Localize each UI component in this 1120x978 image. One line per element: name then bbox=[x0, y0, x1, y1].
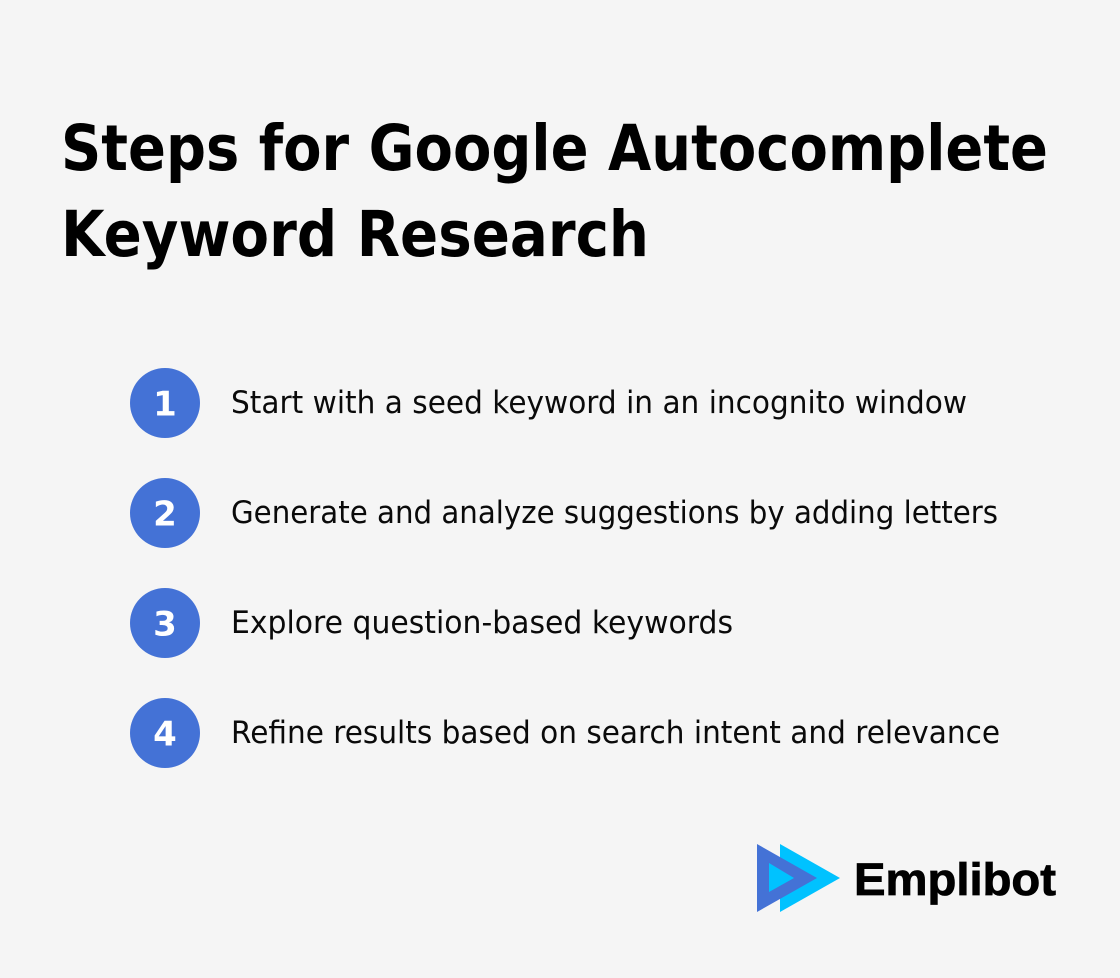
step 3 bbox=[130, 588, 733, 658]
logo wordmark: Emplibot bbox=[854, 854, 1056, 905]
icon: play triangles bbox=[757, 844, 840, 912]
step 4: Refine results based on search intent and relevance bbox=[231, 715, 1000, 751]
step 3: 3 bbox=[153, 604, 177, 644]
step 3: Explore question-based keywords bbox=[231, 605, 733, 641]
step 2 bbox=[130, 478, 998, 548]
title bbox=[61, 112, 1048, 271]
step 1: Start with a seed keyword in an incognito window bbox=[231, 385, 967, 421]
step 4: 4 bbox=[153, 714, 177, 754]
step 2: 2 bbox=[153, 494, 177, 534]
step 4 bbox=[130, 698, 1000, 768]
step 1: 1 bbox=[153, 384, 177, 424]
steps list bbox=[130, 368, 1000, 768]
step 2: Generate and analyze suggestions by adding letters bbox=[231, 495, 998, 531]
title: Keyword Research bbox=[61, 198, 649, 271]
step 1 bbox=[130, 368, 967, 438]
logo: Emplibot bbox=[757, 844, 1056, 912]
